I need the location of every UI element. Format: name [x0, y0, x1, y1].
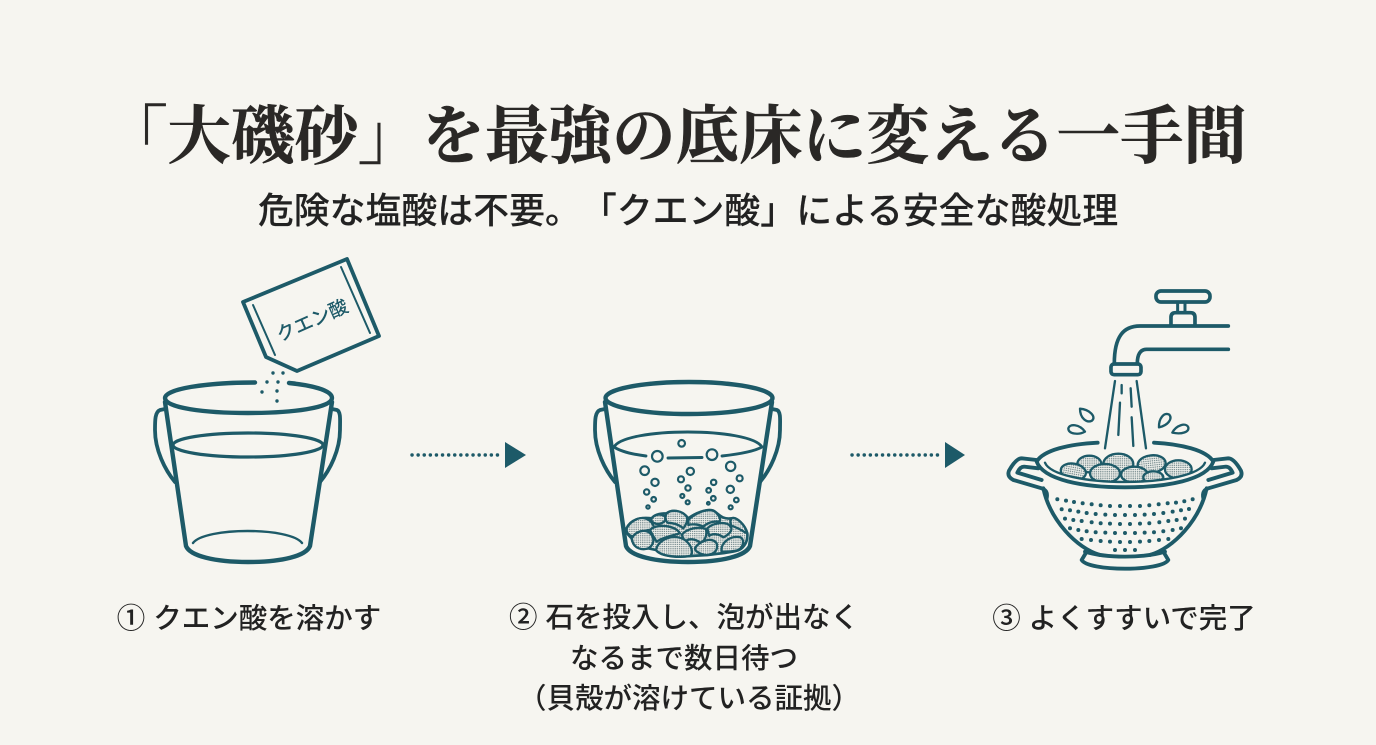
caption: step 2: ② 石を投入し、泡が出なく [509, 602, 859, 634]
colander holes [1055, 497, 1195, 552]
caption: step 1: ① クエン酸を溶かす [117, 603, 381, 635]
caption: step 2: （貝殻が溶けている証拠） [518, 683, 860, 715]
caption: step 3: ③ よくすすいで完了 [992, 603, 1256, 635]
icon: bucket with water [155, 382, 340, 562]
icon: water stream [1105, 381, 1146, 448]
icon: citric acid packet [243, 259, 379, 371]
caption: step 2: なるまで数日待つ [570, 642, 798, 674]
icon: stones [627, 510, 747, 557]
caption: step 2 [509, 602, 860, 715]
icon: bubbles [640, 440, 743, 509]
icon: falling powder [260, 371, 285, 403]
icon: splashes [1068, 409, 1188, 434]
step 1: bucket with citric acid packet [155, 259, 379, 562]
icon: citric acid packet: クエン酸 [273, 295, 352, 346]
subtitle: 危険な塩酸は不要。「クエン酸」による安全な酸処理 [258, 191, 1118, 231]
icon: bucket [595, 382, 780, 562]
title: 「大磯砂」を最強の底床に変える一手間 [104, 101, 1247, 172]
step 3: faucet and colander [1008, 291, 1242, 569]
illustrations [153, 257, 1244, 571]
step 2: bucket with stones and bubbles [595, 382, 780, 562]
icon: faucet [1111, 291, 1228, 375]
arrow: step 2 to step 3 [852, 442, 965, 468]
icon: colander [1008, 443, 1242, 569]
icon: stones in colander [1059, 454, 1192, 483]
arrow: step 1 to step 2 [412, 442, 526, 468]
